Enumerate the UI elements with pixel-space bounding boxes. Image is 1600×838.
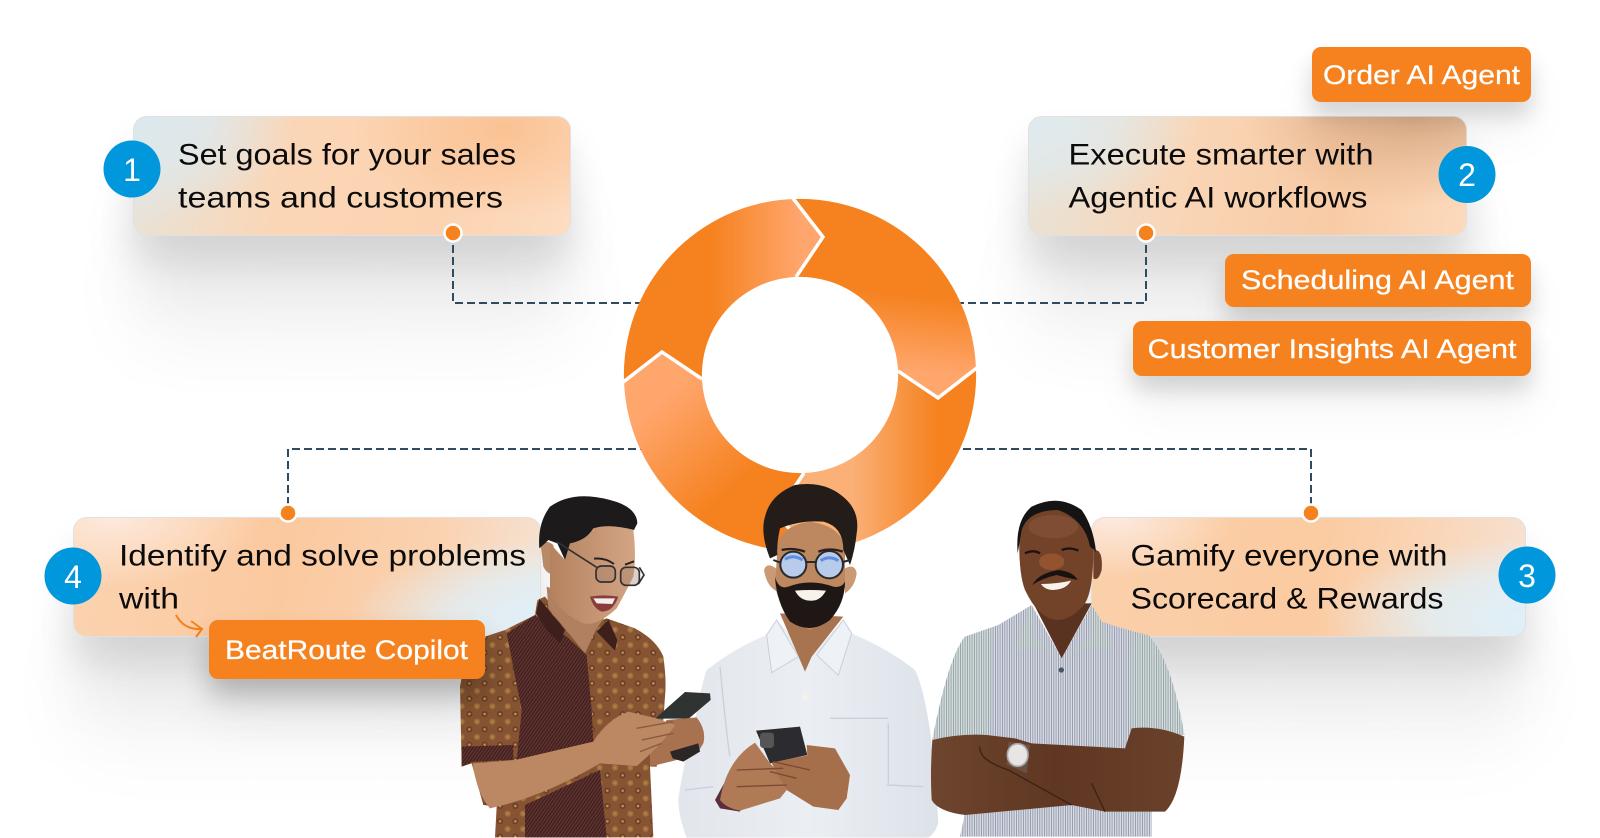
shirt front panel (507, 615, 607, 837)
forehead light (1028, 515, 1078, 538)
badge 3 (1498, 546, 1556, 604)
panel: step 2 execute smarter (1028, 116, 1467, 236)
far arm and hand (650, 717, 704, 767)
shirt (460, 597, 666, 837)
step 1 text: Set goals for your sales (178, 138, 516, 172)
collar (767, 620, 852, 675)
panel: step 4 identify problems (73, 517, 541, 637)
face (775, 522, 845, 630)
connector: step 1 to ring (453, 245, 640, 303)
step 1 text (178, 138, 516, 214)
step 4 text (118, 540, 526, 616)
connector dot: step 4 (280, 504, 296, 522)
badge 2: 2 (1458, 157, 1476, 193)
ear (1093, 550, 1102, 579)
lens glare (785, 557, 838, 561)
neck (1033, 603, 1092, 658)
neck (780, 613, 843, 672)
chip: Customer Insights AI Agent (1133, 321, 1531, 376)
collar (1012, 605, 1117, 658)
hair (1017, 501, 1096, 553)
sleeve hem (462, 745, 513, 767)
watch face (1007, 744, 1028, 766)
hair (539, 496, 637, 560)
mouth (590, 595, 618, 612)
step 2 text (1068, 138, 1374, 214)
finger lines (737, 762, 810, 787)
step 2 text: Execute smarter with (1068, 138, 1374, 172)
connector: step 3 to ring (950, 449, 1311, 505)
connector dot: step 3 (1302, 504, 1320, 522)
near arm and hand (473, 712, 675, 808)
watch strap (1007, 742, 1030, 773)
chip: Customer Insights AI Agent: Customer Insights AI Agent (1148, 334, 1517, 364)
forearms (931, 728, 1184, 815)
chip: Scheduling AI Agent: Scheduling AI Agent (1241, 265, 1515, 295)
badge 2 (1438, 146, 1496, 203)
ear (541, 542, 557, 574)
neck (547, 587, 610, 653)
nose highlight (1039, 553, 1064, 570)
chip: BeatRoute Copilot: BeatRoute Copilot (225, 635, 469, 665)
step 3 text: Scorecard & Rewards (1130, 582, 1444, 616)
collar (536, 599, 617, 651)
connector: step 2 to ring (955, 245, 1146, 303)
ring arrow: top right (794, 199, 976, 398)
panel: step 1 set goals (133, 116, 571, 236)
arm crease (980, 747, 1105, 812)
cycle ring (622, 197, 978, 553)
shirt body (932, 605, 1184, 837)
glasses (773, 551, 850, 578)
shirt sleeves (932, 628, 1184, 740)
badge 1: 1 (123, 152, 141, 188)
person: right man with crossed arms (931, 501, 1184, 837)
hair (763, 484, 857, 565)
moustache (1032, 570, 1078, 585)
connector dot: step 2 (1138, 224, 1154, 242)
person: left man with phone (460, 496, 711, 837)
step 4 text: with (118, 582, 179, 616)
ears (764, 565, 857, 593)
beard (775, 577, 845, 628)
smile (795, 590, 826, 601)
step 1 text: teams and customers (178, 182, 503, 214)
face (550, 526, 635, 624)
camera (760, 733, 774, 748)
ring arrow: bottom right (777, 369, 976, 551)
chip: Order AI Agent (1312, 47, 1531, 102)
badge 3: 3 (1518, 558, 1536, 594)
shirt (678, 620, 938, 838)
right hand (772, 745, 850, 810)
eyes (1025, 548, 1078, 553)
chip: Order AI Agent: Order AI Agent (1323, 60, 1521, 90)
ring arrow: bottom left (624, 352, 806, 551)
watch (670, 743, 700, 762)
phone (655, 692, 711, 719)
connector dot: step 1 (444, 224, 462, 242)
connector: step 4 to ring (288, 449, 650, 505)
glasses (557, 542, 644, 585)
person: centre man with phone (678, 484, 938, 838)
curved arrow to BeatRoute Copilot (176, 615, 202, 637)
step 3 text (1130, 540, 1448, 616)
badge 4 (44, 548, 102, 604)
fingers (637, 722, 673, 752)
chip: Scheduling AI Agent (1225, 254, 1531, 307)
step 4 text: Identify and solve problems (119, 540, 526, 572)
buttons (802, 695, 808, 700)
panel: step 3 gamify (1091, 517, 1526, 637)
badge 1 (104, 140, 160, 198)
left hand (720, 743, 787, 811)
step 3 text: Gamify everyone with (1130, 540, 1448, 572)
brows (594, 558, 634, 565)
cuff (715, 782, 747, 812)
chip: BeatRoute Copilot (209, 620, 485, 679)
shirt folds (685, 667, 923, 790)
badge 4: 4 (64, 559, 82, 595)
step 2 text: Agentic AI workflows (1068, 182, 1368, 214)
shirt button (1059, 667, 1064, 673)
face (1019, 507, 1093, 620)
smile (1041, 581, 1071, 590)
ring arrow: top left (624, 199, 823, 381)
phone (756, 727, 807, 763)
brows (782, 549, 843, 552)
